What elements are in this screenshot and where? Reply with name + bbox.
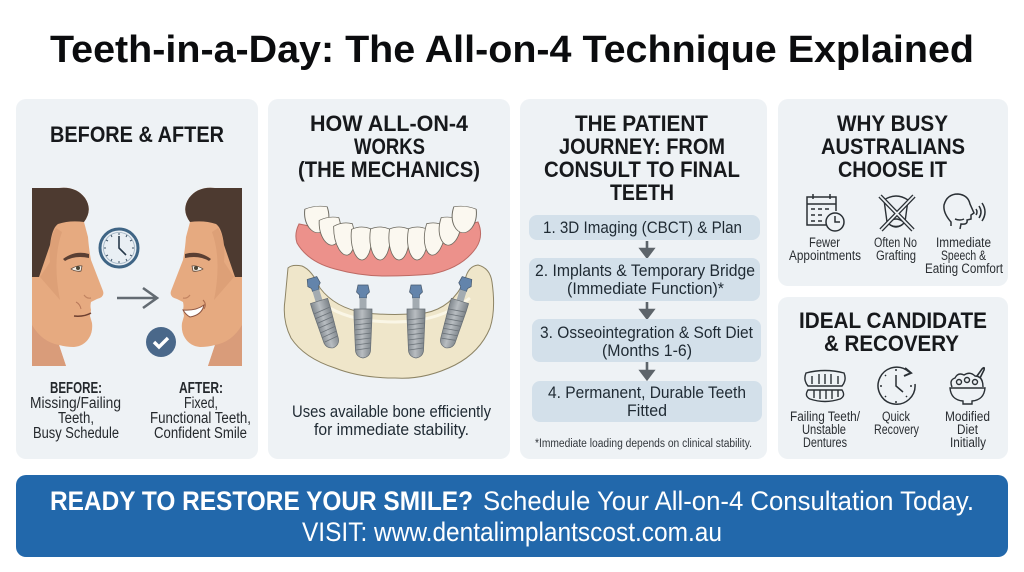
text: mechanics caption: for immediate stability. — [314, 420, 469, 439]
heading: how all-on-4 works: (THE MECHANICS) — [298, 157, 480, 182]
call to action banner: VISIT: www.dentalimplantscost.com.au — [302, 517, 722, 547]
icon: speech head — [944, 194, 985, 229]
label: failing teeth: Failing Teeth/ — [790, 409, 860, 424]
heading: how all-on-4 works: WORKS — [354, 134, 425, 159]
label: fewer appointments: Appointments — [789, 248, 861, 263]
step 3: 3. Osseointegration & Soft Diet — [540, 323, 753, 342]
illustration: denture arch — [296, 205, 481, 276]
label: immediate speech — [925, 235, 1003, 276]
label: often no grafting: Grafting — [876, 248, 916, 263]
call to action banner: READY TO RESTORE YOUR SMILE? — [50, 486, 473, 516]
icon: bowl — [950, 368, 985, 404]
heading: why busy australians — [821, 111, 965, 182]
heading: ideal candidate — [799, 308, 987, 356]
panel: patient journey — [520, 99, 767, 459]
arrow: step 2 to 3 — [641, 302, 653, 318]
icon: recovery clock — [878, 367, 915, 404]
label: failing teeth — [790, 409, 860, 450]
call to action banner: Schedule Your All-on-4 Consultation Today. — [483, 486, 974, 516]
label: immediate speech: Eating Comfort — [925, 261, 1003, 276]
text: before caption: Busy Schedule — [33, 425, 119, 442]
text: mechanics caption: Uses available bone efficiently — [292, 402, 491, 421]
text: mechanics caption — [292, 402, 491, 439]
label: often no grafting: Often No — [874, 235, 917, 250]
step 4: 4. Permanent, Durable Teeth — [548, 383, 746, 402]
label: modified diet: Diet — [957, 422, 978, 437]
panel: ideal candidate and recovery — [778, 297, 1008, 459]
heading: how all-on-4 works — [298, 111, 480, 182]
label: modified diet: Initially — [950, 435, 986, 450]
text: after caption: Fixed, — [184, 395, 218, 412]
step 4: Fitted — [627, 401, 667, 420]
illustration: jaw bone with implants — [284, 265, 494, 378]
heading: ideal candidate: & RECOVERY — [824, 331, 959, 356]
heading: why busy australians: AUSTRALIANS — [821, 134, 965, 159]
label: immediate speech: Speech & — [941, 248, 986, 263]
icon: dentures — [805, 370, 845, 402]
heading: how all-on-4 works: HOW ALL-ON-4 — [310, 111, 469, 136]
label: modified diet — [945, 409, 990, 450]
icon: no grafting — [880, 196, 914, 230]
step 2: (Immediate Function)* — [567, 279, 724, 298]
heading: patient journey: CONSULT TO FINAL — [544, 157, 740, 182]
text: before caption: BEFORE: — [50, 380, 102, 397]
illustration: face before — [32, 188, 103, 366]
label: quick recovery: Recovery — [874, 422, 919, 437]
arrow: step 1 to 2 — [641, 241, 653, 257]
heading: patient journey: JOURNEY: FROM — [559, 134, 725, 159]
arrow: before to after — [117, 288, 157, 308]
step 1: 1. 3D Imaging (CBCT) & Plan — [543, 218, 742, 237]
label: failing teeth: Unstable — [802, 422, 846, 437]
panel: why busy australians choose it — [778, 99, 1008, 286]
label: quick recovery — [874, 409, 919, 437]
heading: ideal candidate: IDEAL CANDIDATE — [799, 308, 987, 333]
panel: how all-on-4 works — [268, 99, 510, 459]
icon: clock — [100, 229, 138, 267]
step 4 — [532, 381, 762, 422]
step 2 — [529, 258, 760, 301]
icon: check badge — [146, 327, 176, 357]
text: after caption: Confident Smile — [154, 425, 247, 442]
heading: before and after: BEFORE & AFTER — [50, 122, 224, 147]
title: Teeth-in-a-Day: The All-on-4 Technique Explained — [50, 29, 974, 71]
label: immediate speech: Immediate — [936, 235, 991, 250]
label: often no grafting — [874, 235, 917, 263]
text: after caption: Functional Teeth, — [150, 410, 251, 427]
step 2: 2. Implants & Temporary Bridge — [535, 261, 755, 280]
text: after caption — [150, 380, 251, 442]
step 3: (Months 1-6) — [602, 341, 692, 360]
step 3 — [532, 319, 761, 362]
text: before caption — [30, 380, 121, 442]
label: failing teeth: Dentures — [803, 435, 847, 450]
heading: why busy australians: CHOOSE IT — [838, 157, 948, 182]
call to action banner — [16, 475, 1008, 557]
icon: calendar with clock — [807, 194, 844, 231]
arrow: step 3 to 4 — [641, 362, 653, 379]
text: before caption: Missing/Failing — [30, 395, 121, 412]
label: quick recovery: Quick — [882, 409, 910, 424]
heading: why busy australians: WHY BUSY — [837, 111, 948, 136]
text: before caption: Teeth, — [58, 410, 94, 427]
panel: before and after — [16, 99, 258, 459]
label: fewer appointments — [789, 235, 861, 263]
heading: patient journey: TEETH — [610, 180, 674, 205]
footnote: *Immediate loading depends on clinical stability. — [535, 438, 752, 450]
heading: patient journey — [544, 111, 740, 205]
illustration: face after — [171, 188, 242, 366]
label: fewer appointments: Fewer — [809, 235, 840, 250]
label: modified diet: Modified — [945, 409, 990, 424]
text: after caption: AFTER: — [179, 380, 223, 397]
heading: patient journey: THE PATIENT — [575, 111, 709, 136]
